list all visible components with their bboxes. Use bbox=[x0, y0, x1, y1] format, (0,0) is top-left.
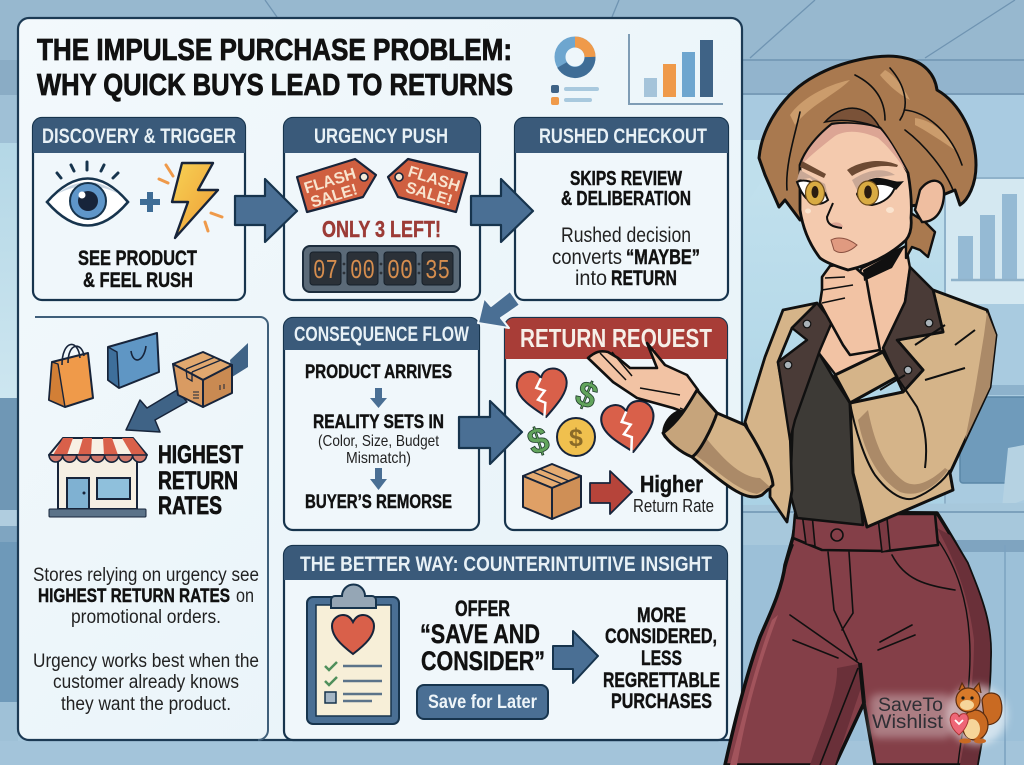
button: save for later bbox=[417, 685, 548, 719]
text: see product and feel rush bbox=[78, 247, 197, 292]
icon: dollar sign green lower: $ bbox=[522, 418, 554, 463]
text: rushed decision: RETURN bbox=[611, 267, 677, 290]
text: highest return rates: HIGHEST bbox=[158, 441, 243, 469]
text: urgency works best bbox=[33, 651, 259, 715]
raised hand fingers bbox=[600, 352, 695, 415]
heading: the better way: THE BETTER WAY: COUNTERINTUITIVE INSIGHT bbox=[300, 553, 712, 576]
bent arm cuff bbox=[835, 352, 897, 403]
text: more considered: REGRETTABLE bbox=[603, 669, 720, 692]
countdown timer: 00 bbox=[387, 257, 413, 287]
jacket shading bbox=[858, 312, 996, 494]
heading: consequence flow: CONSEQUENCE FLOW bbox=[294, 323, 469, 346]
text: see product and feel rush: & FEEL RUSH bbox=[83, 269, 193, 292]
lips bbox=[831, 238, 857, 252]
text: rushed decision: Rushed decision bbox=[561, 224, 691, 247]
cuff opening bbox=[657, 405, 693, 445]
icon: flash sale tag left: FLASH bbox=[302, 166, 358, 197]
hair strands bbox=[787, 68, 962, 190]
jacket left side bbox=[745, 303, 817, 522]
text: stores relying on urgency bbox=[33, 565, 259, 628]
text: offer save and consider: CONSIDER” bbox=[421, 646, 545, 676]
step: reality sets in: (Color, Size, Budget bbox=[318, 433, 439, 450]
text: skips review: & DELIBERATION bbox=[561, 188, 691, 210]
text: offer save and consider: OFFER bbox=[455, 596, 510, 621]
extended sleeve bbox=[692, 413, 773, 497]
title: WHY QUICK BUYS LEAD TO RETURNS bbox=[37, 67, 513, 102]
icon: plus bbox=[140, 192, 160, 212]
title: THE IMPULSE PURCHASE PROBLEM: bbox=[37, 32, 512, 67]
text: skips review bbox=[561, 168, 691, 210]
arrow: diagonal checkout to return bbox=[478, 291, 520, 328]
arrow: down two bbox=[370, 468, 387, 490]
jacket right side bbox=[850, 290, 996, 527]
hair behind ear bbox=[906, 210, 935, 258]
icon: blue shopping bag bbox=[108, 333, 159, 388]
sleeve shading bbox=[695, 438, 770, 494]
countdown timer: 00 bbox=[350, 257, 375, 287]
text: higher return rate: Return Rate bbox=[633, 496, 714, 516]
text: stores relying on urgency: Stores relying on urgency see bbox=[33, 565, 259, 586]
icon: parcel box bbox=[523, 464, 581, 519]
panel: urgency push bbox=[284, 118, 480, 300]
neck shadow bbox=[863, 246, 905, 281]
arrow: consequence to return bbox=[459, 401, 522, 464]
icon: dollar sign green upper: $ bbox=[570, 372, 604, 417]
character: thinking woman bbox=[588, 56, 996, 765]
text: higher return rate: Higher bbox=[640, 471, 703, 497]
text: stores relying on urgency: promotional orders. bbox=[71, 607, 221, 628]
watermark: save to wishlist: SaveTo bbox=[878, 695, 943, 716]
text: rushed decision: “MAYBE” bbox=[626, 246, 700, 269]
text: rushed decision bbox=[552, 224, 700, 290]
extended cuff bbox=[663, 390, 717, 457]
icon: cardboard box bbox=[173, 352, 232, 407]
panel: highest return rates bbox=[33, 317, 268, 740]
text: urgency works best: Urgency works best when the bbox=[33, 651, 259, 672]
icon: flash sale tag right: FLASH bbox=[406, 164, 462, 195]
text: higher return rate bbox=[633, 471, 714, 516]
chin hand fingers bbox=[822, 277, 853, 303]
hair back bbox=[759, 56, 976, 220]
icon: gold coin: $ bbox=[569, 424, 583, 452]
arrow: down one bbox=[370, 388, 387, 408]
icon: storefront bbox=[49, 438, 147, 517]
icon: eye bbox=[47, 162, 128, 226]
arrow: urgency to checkout bbox=[471, 179, 533, 242]
text: offer save and consider: “SAVE AND bbox=[420, 619, 540, 649]
panel: the better way bbox=[284, 546, 727, 740]
watermark: save to wishlist bbox=[870, 683, 1007, 745]
eyebrows bbox=[800, 161, 898, 178]
text: more considered: CONSIDERED, bbox=[605, 625, 717, 648]
button: save for later: Save for Later bbox=[428, 692, 538, 713]
icon: bar chart bbox=[629, 34, 723, 104]
text: offer save and consider bbox=[420, 596, 545, 676]
icon: broken heart right bbox=[599, 399, 659, 456]
icon: clipboard bbox=[307, 584, 399, 724]
title bbox=[37, 32, 513, 102]
countdown timer bbox=[303, 246, 460, 292]
lapel studs bbox=[784, 319, 933, 374]
step: reality sets in bbox=[313, 412, 444, 467]
text: rushed decision: into bbox=[575, 267, 607, 290]
hair highlights bbox=[790, 70, 955, 150]
icon: lightning bolt bbox=[159, 163, 222, 238]
text: stores relying on urgency: on bbox=[236, 586, 254, 607]
countdown timer: 35 bbox=[425, 257, 450, 287]
raised hand bbox=[588, 343, 698, 417]
icon: orange shopping bag bbox=[49, 344, 93, 407]
arrow: box to higher rate bbox=[590, 471, 632, 514]
text: highest return rates bbox=[158, 441, 243, 520]
forehead shadow bbox=[801, 124, 907, 172]
nose bbox=[827, 203, 843, 228]
step: reality sets in: Mismatch) bbox=[346, 450, 411, 467]
shirt bbox=[790, 350, 863, 525]
countdown timer: 07 bbox=[313, 257, 338, 287]
step: product arrives: PRODUCT ARRIVES bbox=[305, 362, 452, 383]
text: more considered: PURCHASES bbox=[611, 690, 712, 713]
pants bbox=[725, 512, 990, 765]
left lapel bbox=[778, 303, 832, 440]
heading: discovery: DISCOVERY & TRIGGER bbox=[42, 125, 236, 148]
text: only 3 left: ONLY 3 LEFT! bbox=[322, 216, 441, 242]
text: stores relying on urgency: HIGHEST RETURN RATES bbox=[38, 586, 230, 607]
bent arm outline bbox=[850, 325, 975, 499]
right eye bbox=[857, 178, 904, 205]
chin hand bbox=[820, 263, 880, 355]
face bbox=[800, 123, 911, 270]
panel: discovery and trigger bbox=[33, 118, 245, 300]
main white panel bbox=[18, 18, 742, 740]
panel: consequence flow bbox=[284, 318, 479, 530]
text: urgency works best: customer already knows bbox=[53, 672, 239, 693]
right lapel bbox=[883, 267, 943, 392]
icon: squirrel with heart bbox=[950, 683, 1002, 744]
heading: rushed checkout: RUSHED CHECKOUT bbox=[539, 125, 707, 148]
panel: rushed checkout bbox=[515, 118, 728, 300]
arrow: box to store bbox=[126, 343, 248, 432]
left eye bbox=[797, 181, 828, 205]
text: see product and feel rush: SEE PRODUCT bbox=[78, 247, 197, 270]
step: buyers remorse: BUYER’S REMORSE bbox=[305, 492, 452, 513]
step: reality sets in: REALITY SETS IN bbox=[313, 412, 444, 433]
text: more considered: MORE bbox=[637, 604, 686, 627]
neck and chest bbox=[818, 246, 910, 378]
text: rushed decision: converts bbox=[552, 246, 622, 269]
text: skips review: SKIPS REVIEW bbox=[570, 168, 682, 190]
ear bbox=[915, 181, 944, 222]
icon: broken heart left bbox=[515, 367, 571, 420]
cheek highlights bbox=[805, 207, 894, 214]
panel: return request bbox=[505, 318, 727, 530]
arrow: offer to result bbox=[553, 631, 598, 683]
eyelid shadows bbox=[797, 170, 895, 196]
icon: flash sale tag left: SALE! bbox=[309, 181, 360, 212]
text: urgency works best: they want the product. bbox=[61, 694, 231, 715]
text: more considered: LESS bbox=[641, 647, 682, 670]
icon: flash sale tag left bbox=[297, 159, 376, 212]
text: more considered bbox=[603, 604, 720, 713]
text: highest return rates: RETURN bbox=[158, 467, 238, 495]
hair fringe lock bbox=[825, 108, 880, 128]
text: highest return rates: RATES bbox=[158, 492, 222, 520]
icon: flash sale tag right bbox=[388, 159, 467, 212]
heading: return request: RETURN REQUEST bbox=[520, 323, 712, 353]
heading: urgency push: URGENCY PUSH bbox=[314, 125, 448, 148]
icon: flash sale tag right: SALE! bbox=[403, 179, 454, 210]
icon: donut chart with legend bbox=[551, 42, 599, 105]
arrow: discovery to urgency bbox=[235, 179, 297, 242]
watermark: save to wishlist: Wishlist bbox=[872, 712, 944, 733]
icon: gold coin bbox=[557, 418, 595, 456]
